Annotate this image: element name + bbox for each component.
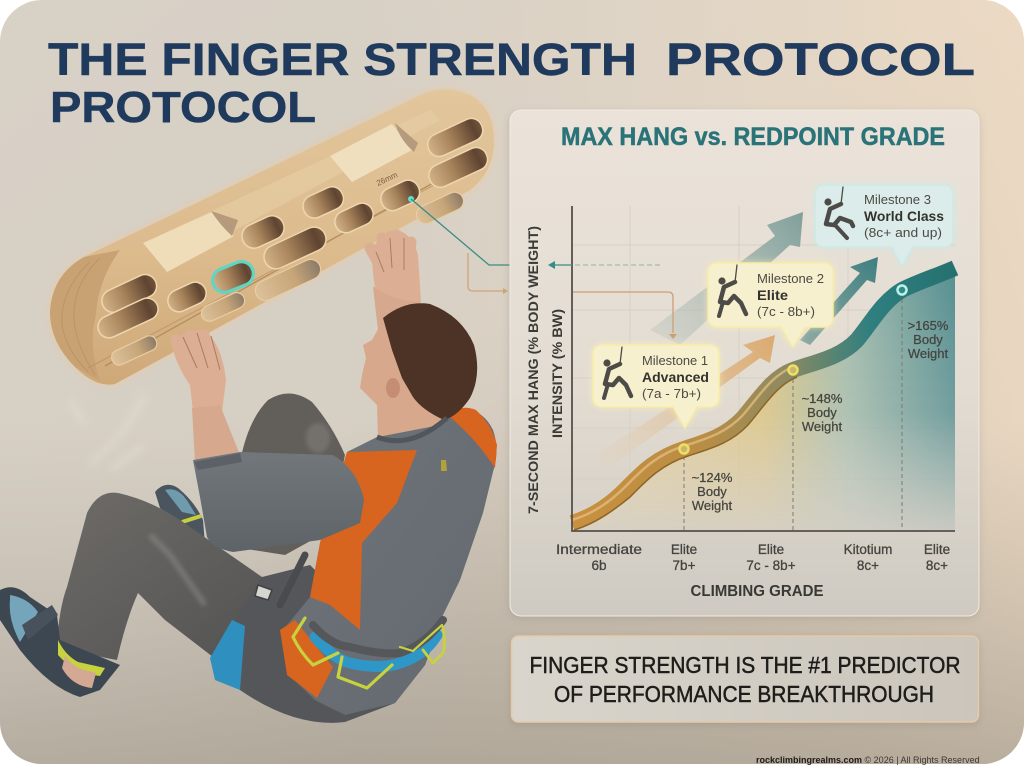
callout: milestone 1: (7a - 7b+) <box>642 386 701 401</box>
callout: milestone 2 <box>708 263 833 347</box>
callout: key takeaway <box>511 636 979 725</box>
title: THE FINGER STRENGTH <box>48 34 637 85</box>
x axis labels: Kitotium <box>844 542 892 557</box>
icon: climber <box>718 265 746 316</box>
y axis title: 7-SECOND MAX HANG (% BODY WEIGHT) <box>525 226 541 514</box>
callout: milestone 3: (8c+ and up) <box>864 225 942 240</box>
percent labels <box>692 318 949 513</box>
y axis title: INTENSITY (% BW) <box>549 309 565 438</box>
x axis labels <box>556 542 950 573</box>
x axis labels: 8c+ <box>857 558 879 573</box>
x axis labels: Elite <box>924 542 950 557</box>
harness <box>210 555 444 690</box>
icon: climber <box>603 347 631 398</box>
hips <box>213 565 440 723</box>
title: PROTOCOL <box>666 34 975 85</box>
connector lines from board <box>408 196 548 294</box>
x axis labels: Intermediate <box>556 542 642 557</box>
board mark: 26mm <box>375 170 399 188</box>
percent labels: Weight <box>692 498 732 513</box>
x axis labels: 7b+ <box>673 558 696 573</box>
back leg <box>240 393 345 555</box>
percent labels: ~124% <box>692 470 733 485</box>
x axis labels: 7c - 8b+ <box>746 558 796 573</box>
callout: milestone 1: Advanced <box>642 369 709 385</box>
sleeve <box>193 452 364 552</box>
growth arrows <box>593 212 878 470</box>
callout: milestone 3: Milestone 3 <box>864 192 931 207</box>
back foot <box>155 485 205 545</box>
x axis title: CLIMBING GRADE <box>690 583 824 600</box>
jug holds <box>211 123 418 236</box>
percent labels: Body <box>913 332 943 347</box>
callout: milestone 2: (7c - 8b+) <box>757 304 815 319</box>
chart heading: MAX HANG vs. REDPOINT GRADE <box>561 123 945 151</box>
left forearm <box>192 405 240 462</box>
x axis labels: Elite <box>758 542 784 557</box>
collar <box>377 418 447 441</box>
x axis labels: Elite <box>671 542 697 557</box>
percent labels: Body <box>807 405 837 420</box>
callout: key takeaway: FINGER STRENGTH IS THE #1 PREDICTOR <box>530 652 960 678</box>
hair <box>383 303 477 420</box>
shirt logo <box>441 460 447 471</box>
finger pockets <box>94 115 491 367</box>
y axis title <box>525 226 565 514</box>
percent labels: >165% <box>908 318 949 333</box>
highlighted pocket <box>209 258 257 296</box>
callout: milestone 2: Elite <box>757 287 788 303</box>
hangboard <box>50 89 494 385</box>
callout: milestone 3: World Class <box>864 208 944 224</box>
footer credit: rockclimbingrealms.com © 2026 | All Rights Reserved <box>756 755 980 765</box>
percent labels: Weight <box>802 419 842 434</box>
area under curve <box>608 276 955 530</box>
hand left <box>172 330 226 412</box>
callout: milestone 1 <box>593 345 719 428</box>
x axis labels: 6b <box>591 558 607 573</box>
callout: key takeaway: OF PERFORMANCE BREAKTHROUGH <box>554 681 934 707</box>
raised arm right <box>373 287 422 365</box>
torso <box>283 410 496 715</box>
callout: milestone 1: Milestone 1 <box>642 353 708 368</box>
percent labels: Weight <box>908 346 948 361</box>
axis pointer lines <box>548 261 677 339</box>
curve markers <box>680 286 906 454</box>
percent labels: ~148% <box>802 391 843 406</box>
title: PROTOCOL <box>50 83 316 132</box>
panel: max hang chart <box>509 110 979 618</box>
neck and face <box>360 320 446 437</box>
ear <box>386 378 400 398</box>
percent labels: Body <box>697 484 727 499</box>
callout: milestone 3 <box>815 185 953 267</box>
performance curve <box>572 268 955 530</box>
axes <box>572 206 955 531</box>
hand right <box>370 230 421 302</box>
orange shirt panels <box>280 408 497 698</box>
front shoe <box>0 587 120 697</box>
x axis labels: 8c+ <box>926 558 948 573</box>
climber <box>0 230 497 723</box>
title <box>48 34 975 132</box>
icon: climber <box>824 187 853 238</box>
dashed drop lines <box>684 292 902 531</box>
front leg <box>57 493 310 680</box>
callout: milestone 2: Milestone 2 <box>757 271 824 286</box>
